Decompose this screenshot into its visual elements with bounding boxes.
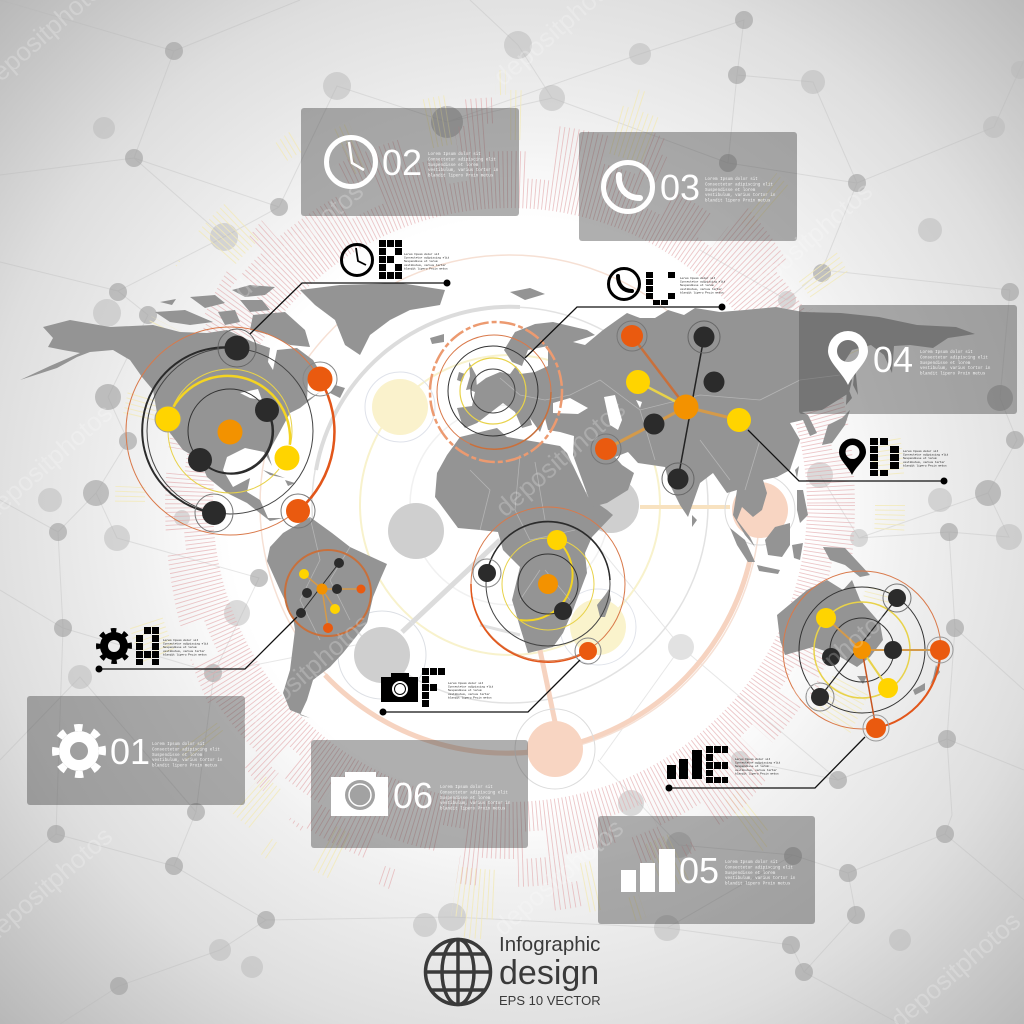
text block 04: Suspendisse et lorem	[920, 361, 971, 366]
logo text: design	[499, 954, 599, 992]
pixel letter D	[870, 438, 899, 476]
cluster: South America	[285, 550, 371, 636]
stock watermarks: depositphotos	[736, 176, 878, 305]
icon: black camera	[381, 673, 418, 702]
leader line A	[96, 617, 297, 672]
text block 06: Lorem Ipsum dolor sit	[440, 785, 493, 790]
panel 06	[311, 740, 528, 848]
small text E: Lorem Ipsum dolor sit	[735, 757, 771, 761]
text block 03: Lorem Ipsum dolor sit	[705, 177, 758, 182]
small text B: vestibulum, varius tortor	[404, 263, 446, 267]
number 04: 04	[873, 339, 913, 380]
label A	[96, 617, 297, 672]
logo text: Infographic	[499, 933, 600, 956]
text block 05: vestibulum, varius tortor in	[725, 876, 796, 881]
small text E: Consectetur adipiscing elit	[735, 761, 781, 765]
text block 03: blandit lipero Proin metus	[705, 199, 771, 204]
icon: black bar chart	[667, 750, 702, 779]
small text C: vestibulum, varius tortor	[680, 287, 722, 291]
text block 02: vestibulum, varius tortor in	[428, 168, 499, 173]
small text B: Suspendisse et lorem	[404, 259, 438, 263]
small text A: Consectetur adipiscing elit	[163, 642, 209, 646]
text block 05: Consectetur adipiscing elit	[725, 865, 793, 870]
icon: white phone	[604, 162, 652, 212]
map: Australia and New Zealand	[777, 580, 940, 695]
small text E: vestibulum, varius tortor	[735, 768, 777, 772]
central concentric rings	[260, 255, 760, 755]
small text D: vestibulum, varius tortor	[903, 460, 945, 464]
cluster: North America	[126, 327, 337, 535]
small text E: Suspendisse et lorem	[735, 764, 769, 768]
small text C: Consectetur adipiscing elit	[680, 280, 726, 284]
map: inland seas	[240, 389, 642, 430]
leader line F	[380, 660, 580, 716]
text block 02: Suspendisse et lorem	[428, 163, 479, 168]
world map	[20, 283, 975, 718]
pixel letter A	[136, 627, 159, 665]
text block 01: Lorem Ipsum dolor sit	[152, 742, 205, 747]
text block 06: Suspendisse et lorem	[440, 796, 491, 801]
label D	[748, 430, 949, 484]
radial burst of pink and yellow ticks	[110, 105, 910, 905]
pixel letter B	[379, 240, 402, 279]
label C	[525, 268, 726, 358]
icon: black clock	[342, 244, 372, 276]
small text F: Consectetur adipiscing elit	[448, 685, 494, 689]
text block 01: blandit lipero Proin metus	[152, 764, 218, 769]
map: North America	[20, 320, 322, 521]
map: Greenland	[300, 283, 445, 355]
icon: white map pin	[828, 331, 868, 385]
stock watermarks: depositphotos	[234, 608, 376, 737]
small text C: blandit lipero Proin metus	[680, 290, 724, 294]
small text B: Lorem Ipsum dolor sit	[404, 252, 440, 256]
text block 05: Lorem Ipsum dolor sit	[725, 860, 778, 865]
cluster: Australia	[783, 571, 953, 741]
logo: globe icon	[426, 939, 491, 1005]
leader line E	[666, 737, 865, 792]
panel 03	[579, 132, 797, 241]
map: islands of Europe and Asia	[430, 288, 870, 577]
number 05: 05	[679, 850, 719, 891]
panel 01	[27, 696, 245, 805]
small text F: Suspendisse et lorem	[448, 688, 482, 692]
panel 02	[301, 108, 519, 216]
leader line C	[525, 304, 726, 358]
small text E: blandit lipero Proin metus	[735, 771, 779, 775]
icon: white gear	[56, 728, 102, 774]
icon: white clock	[326, 138, 376, 186]
pixel letter E	[706, 746, 728, 783]
cluster: Asia	[591, 321, 751, 495]
small text C: Suspendisse et lorem	[680, 283, 714, 287]
icon: white bar chart	[621, 849, 675, 892]
number 02: 02	[382, 142, 422, 183]
text block 03: Consectetur adipiscing elit	[705, 182, 773, 187]
stock watermarks: depositphotos	[754, 601, 896, 730]
icon: black gear	[98, 630, 130, 662]
small text D: blandit lipero Proin metus	[903, 463, 947, 467]
small text A: vestibulum, varius tortor	[163, 649, 205, 653]
pixel letter F	[422, 668, 445, 707]
small text D: Lorem Ipsum dolor sit	[903, 449, 939, 453]
text block 01: Consectetur adipiscing elit	[152, 747, 220, 752]
icon: black phone	[608, 268, 640, 300]
text block 05: Suspendisse et lorem	[725, 871, 776, 876]
number 01: 01	[110, 731, 150, 772]
small text B: Consectetur adipiscing elit	[404, 256, 450, 260]
text block 01: vestibulum, varius tortor in	[152, 758, 223, 763]
panel 04	[799, 305, 1017, 414]
small text B: blandit lipero Proin metus	[404, 266, 448, 270]
text block 04: Consectetur adipiscing elit	[920, 355, 988, 360]
small text F: Lorem Ipsum dolor sit	[448, 681, 484, 685]
small text C: Lorem Ipsum dolor sit	[680, 276, 716, 280]
small text D: Consectetur adipiscing elit	[903, 453, 949, 457]
map: Africa	[435, 428, 613, 653]
small text D: Suspendisse et lorem	[903, 456, 937, 460]
text block 06: vestibulum, varius tortor in	[440, 801, 511, 806]
small text F: blandit lipero Proin metus	[448, 695, 492, 699]
text block 06: Consectetur adipiscing elit	[440, 790, 508, 795]
logo text	[499, 933, 601, 1008]
text block 04: blandit lipero Proin metus	[920, 372, 986, 377]
text block 02: blandit lipero Proin metus	[428, 174, 494, 179]
icon: white camera	[331, 772, 388, 816]
large pastel circles	[338, 372, 795, 789]
icon: black map pin	[839, 439, 866, 475]
small text A: Lorem Ipsum dolor sit	[163, 638, 199, 642]
logo text: EPS 10 VECTOR	[499, 993, 601, 1008]
text block 04: vestibulum, varius tortor in	[920, 366, 991, 371]
text block 02: Lorem Ipsum dolor sit	[428, 152, 481, 157]
leader line B	[250, 280, 450, 334]
text block 02: Consectetur adipiscing elit	[428, 157, 496, 162]
text block 05: blandit lipero Proin metus	[725, 882, 791, 887]
text block 04: Lorem Ipsum dolor sit	[920, 350, 973, 355]
map: Eurasia	[457, 307, 975, 547]
panel 05	[598, 816, 815, 924]
stock watermarks: depositphotos	[489, 394, 631, 523]
label F	[380, 660, 580, 716]
label B	[250, 240, 450, 334]
number 03: 03	[660, 167, 700, 208]
label E	[666, 737, 865, 792]
small text A: Suspendisse et lorem	[163, 645, 197, 649]
small text F: vestibulum, varius tortor	[448, 692, 490, 696]
text block 03: Suspendisse et lorem	[705, 188, 756, 193]
map: Madagascar	[597, 589, 611, 617]
cluster: Europe	[430, 322, 562, 462]
stock watermarks: depositphotos	[487, 813, 629, 942]
number 06: 06	[393, 775, 433, 816]
text block 06: blandit lipero Proin metus	[440, 807, 506, 812]
leader line D	[748, 430, 948, 484]
stock watermarks: depositphotos	[227, 176, 369, 305]
small text A: blandit lipero Proin metus	[163, 652, 207, 656]
map: South America	[267, 517, 387, 718]
text block 03: vestibulum, varius tortor in	[705, 193, 776, 198]
map: country borders	[300, 375, 840, 640]
cluster: Africa	[471, 507, 625, 664]
map: Canadian Arctic islands	[155, 285, 345, 486]
pixel letter C	[646, 272, 675, 305]
text block 01: Suspendisse et lorem	[152, 753, 203, 758]
